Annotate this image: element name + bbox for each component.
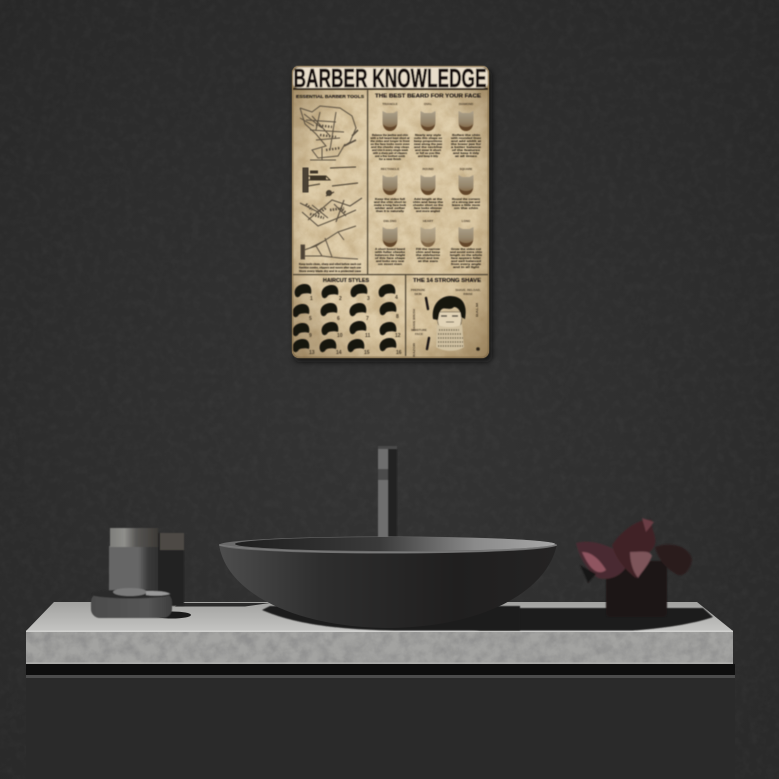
beard descriptions, row 2: than it is naturally: [376, 209, 404, 213]
bowl rim: [219, 536, 557, 554]
beard descriptions, row 3: and avoid extra chin: [450, 250, 482, 254]
tool drawing: scissors and combs: [300, 198, 362, 226]
beard descriptions, row 3: and in all light: [453, 265, 479, 269]
beard descriptions, row 1: for a neat finish: [379, 157, 401, 161]
beard style names, row 1: TRIANGLE: [382, 102, 398, 106]
beard descriptions, row 2: wider and softer: [374, 206, 406, 210]
beard descriptions, row 1: of the features: [452, 148, 480, 152]
beard style names, row 2: RECTANGLE: [381, 167, 399, 171]
shave labels: SKIN: [414, 292, 422, 296]
leaves: [576, 518, 692, 583]
beard descriptions, row 1: so the face looks more even: [370, 142, 410, 146]
beard style names, row 3: LONG: [462, 219, 471, 223]
beard style names, row 2: ROUND: [422, 167, 434, 171]
haircut numbers: 5: [309, 316, 312, 322]
beard descriptions, row 3: face appears fuller: [451, 256, 482, 260]
beard descriptions, row 1: a better balance: [451, 145, 481, 149]
beard descriptions, row 1: Soften the chin: [452, 133, 480, 137]
beard descriptions, row 2: and more angled: [416, 209, 440, 213]
beard descriptions, row 1: and keep it tidy: [418, 154, 438, 158]
vertical side labels: [412, 302, 479, 357]
panel: the best beard for your face: [370, 94, 482, 269]
beard descriptions, row 1: and add width at: [451, 139, 481, 143]
sign shadow: [294, 70, 492, 362]
shave labels: MOISTURE: [411, 328, 427, 332]
beard descriptions, row 1: neat along the jaw: [414, 142, 443, 146]
panel: essential barber tools: [296, 94, 364, 273]
tools caption: Sanitize combs, clippers and razors after each use: [299, 266, 362, 270]
panel grid lines: [293, 90, 488, 356]
shave labels: [411, 288, 481, 336]
beard descriptions, row 3: with fuller cheeks: [374, 250, 405, 254]
beard descriptions, row 1: keep proportions: [414, 139, 442, 143]
haircut numbers: 8: [396, 314, 399, 320]
beard descriptions, row 2: Add length at the: [414, 197, 442, 201]
haircut numbers: 14: [336, 350, 342, 356]
beard descriptions, row 3: [374, 247, 482, 269]
beard descriptions, row 3: A short boxed beard: [375, 247, 405, 251]
beard descriptions, row 1: with a sharp pair of clippers: [372, 151, 407, 155]
panel: haircut styles: HAIRCUT STYLES: [323, 278, 369, 284]
beard style names, row 1: [382, 102, 474, 106]
beard descriptions, row 3: at the ears: [418, 259, 438, 263]
beard descriptions, row 2: cheeks short so the: [413, 203, 443, 207]
faucet: [378, 446, 397, 538]
beard descriptions, row 2: face looks slimmer: [414, 206, 443, 210]
beard descriptions, row 1: and a fine toothed comb: [375, 154, 405, 158]
haircut numbers: 16: [396, 350, 402, 356]
beard faces, row 2: [382, 175, 474, 195]
beard faces, row 3: [382, 227, 474, 247]
shave labels: PREPARE: [411, 288, 425, 292]
vertical side labels: SHAVE BRUSH: [412, 309, 416, 331]
beard descriptions, row 1: suits this shape so: [414, 136, 442, 140]
beard style names, row 2: SQUARE: [460, 167, 472, 171]
countertop: [26, 602, 733, 664]
pot: [606, 561, 667, 617]
panel: essential barber tools: ESSENTIAL BARBER TOOLS: [296, 94, 364, 99]
beard descriptions, row 3: and well balanced: [451, 259, 481, 263]
tool drawing: barber chair: [300, 106, 358, 160]
vessel sink: [219, 536, 557, 628]
beard descriptions, row 1: Balance the jawline and chin: [372, 133, 408, 137]
beard style names, row 3: OBLONG: [383, 219, 397, 223]
beard descriptions, row 1: at all times: [455, 154, 477, 158]
tray: [90, 588, 172, 618]
beard style names, row 3: HEART: [423, 219, 433, 223]
plant in black pot: [576, 518, 692, 617]
beard descriptions, row 2: and the chin short to: [374, 200, 406, 204]
haircut numbers: 2: [339, 296, 342, 302]
beard descriptions, row 1: and trim it every single week: [372, 148, 408, 152]
shave labels: RINSE: [463, 292, 473, 296]
shadows on countertop: [153, 603, 713, 630]
tool drawing: straight razor: [301, 226, 358, 259]
haircut numbers: [309, 295, 402, 356]
beard descriptions, row 3: balances the height: [375, 253, 405, 257]
vanity cabinet: [26, 664, 735, 779]
beard descriptions, row 3: Grow the sides out: [451, 247, 481, 251]
man face with lathered beard: [433, 296, 466, 351]
beard descriptions, row 1: and wear it short: [415, 148, 441, 152]
panel: the 14 strong shave: THE 14 STRONG SHAVE: [413, 278, 481, 284]
bowl body: [219, 544, 557, 628]
haircut numbers: 12: [395, 333, 401, 339]
beard descriptions, row 3: on most men: [378, 262, 402, 266]
haircut numbers: 15: [364, 350, 370, 356]
soap dispenser bottles and tray: [90, 528, 184, 618]
beard descriptions, row 3: of this face shape: [375, 256, 405, 260]
vertical side labels: RAZOR: [412, 342, 416, 357]
beard style names, row 3: [383, 219, 471, 223]
beard descriptions, row 2: leave a little more: [452, 203, 480, 207]
metal sign: Barber Knowledge: [292, 63, 492, 362]
panel: the best beard for your face: THE BEST BEARD FOR YOUR FACE: [375, 94, 481, 100]
beard descriptions, row 2: chin and keep the: [413, 200, 443, 204]
beard descriptions, row 1: with a full beard kept short at: [370, 136, 410, 140]
beard descriptions, row 1: with rounded lines: [450, 136, 481, 140]
edge wear: [292, 66, 488, 358]
beard style names, row 1: OVAL: [424, 102, 432, 106]
beard descriptions, row 1: and the cheeks stay clean: [371, 145, 409, 149]
shave labels: SHAVE, RELOAD,: [455, 288, 481, 292]
beard descriptions, row 3: short and low: [417, 256, 440, 260]
beard faces, row 1: [382, 111, 474, 131]
beard descriptions, row 3: from every angle: [451, 262, 481, 266]
beard descriptions, row 2: make a long face look: [374, 203, 406, 207]
countertop front face: [26, 631, 733, 664]
haircut numbers: 1: [310, 296, 313, 302]
haircut numbers: 4: [395, 295, 398, 301]
haircut numbers: 9: [309, 333, 312, 339]
beard style names, row 1: DIAMOND: [459, 102, 474, 106]
haircut numbers: 13: [309, 350, 315, 356]
beard descriptions, row 3: chin and keep: [416, 250, 440, 254]
panel: the 14 strong shave: [411, 278, 481, 357]
beard descriptions, row 1: the sides and longer in front: [370, 139, 410, 143]
front bottle: [109, 528, 158, 594]
beard descriptions, row 2: Round the corners: [452, 197, 480, 201]
beard descriptions, row 1: [370, 133, 482, 161]
beard descriptions, row 1: the lower jaw for: [451, 142, 482, 146]
vertical side labels: BALM: [475, 302, 479, 317]
tool drawing: clippers: [303, 167, 358, 196]
beard descriptions, row 2: of a strong jaw and: [452, 200, 480, 204]
haircut numbers: 11: [365, 333, 371, 339]
beard descriptions, row 1: and keep it tidy: [453, 151, 479, 155]
haircut icons grid: [293, 284, 396, 352]
beard descriptions, row 2: Keep the sides full: [375, 197, 405, 201]
haircut numbers: 7: [366, 316, 369, 322]
beard descriptions, row 2: [374, 197, 480, 213]
beard style names, row 2: [381, 167, 472, 171]
shave tools: [426, 298, 429, 349]
beard descriptions, row 1: Nearly any style: [415, 133, 441, 137]
beard descriptions, row 3: Fill the narrow: [416, 247, 441, 251]
shave labels: FACE: [415, 332, 423, 336]
basin interior: [235, 537, 555, 551]
beard descriptions, row 2: on the chin: [454, 206, 478, 210]
haircut numbers: 10: [337, 333, 343, 339]
title: [293, 63, 488, 93]
beard descriptions, row 1: and the neckline: [414, 145, 442, 149]
countertop surface: [26, 602, 733, 631]
sign rivet: [476, 347, 480, 351]
haircut numbers: 3: [367, 296, 370, 302]
panel: haircut styles: [293, 278, 402, 356]
title: BARBER KNOWLEDGE: [294, 63, 486, 93]
tools caption: Keep tools clean, sharp and oiled before each cut: [299, 262, 361, 266]
haircut numbers: 6: [337, 316, 340, 322]
beard descriptions, row 3: and looks very neat: [376, 259, 404, 263]
tools caption: Store every blade dry and in a protected case: [299, 269, 362, 273]
beard descriptions, row 3: the sideburns: [416, 253, 440, 257]
beard descriptions, row 3: length so the whole: [450, 253, 482, 257]
sign paper background: [292, 66, 489, 358]
beard descriptions, row 1: or full as you like: [416, 151, 440, 155]
tools caption: [299, 262, 362, 273]
back bottle: [158, 533, 184, 606]
